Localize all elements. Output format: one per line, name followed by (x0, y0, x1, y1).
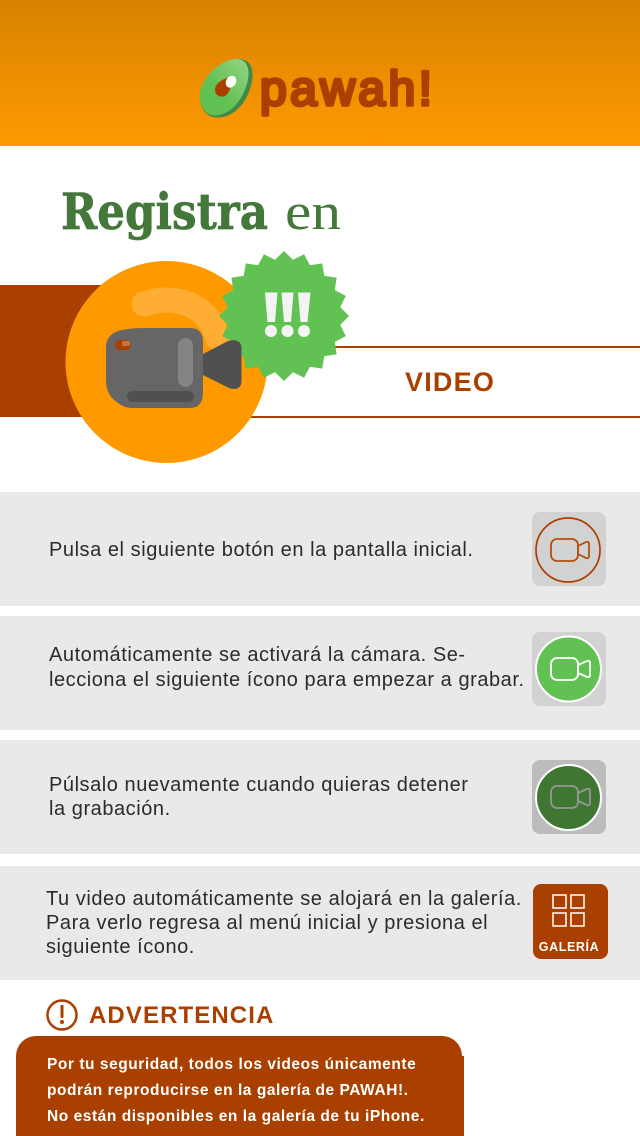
icon: gallery button: GALERÍA (539, 939, 599, 954)
title: Registra (61, 182, 268, 241)
step 4 text (46, 888, 522, 958)
icon: video camera (106, 328, 242, 408)
step 4 text: Tu video automáticamente se alojará en la galería. (46, 888, 522, 910)
logo: pawah! (260, 63, 432, 116)
warning text (47, 1056, 425, 1125)
brown side block (0, 285, 130, 417)
warning text: No están disponibles en la galería de tu iPhone. (47, 1108, 425, 1125)
icon: green record button (532, 632, 606, 706)
icon: gallery button (533, 884, 608, 959)
step 2 text: lecciona el siguiente ícono para empezar a grabar. (49, 669, 525, 691)
step 3 panel (0, 740, 640, 854)
step 1 text: Pulsa el siguiente botón en la pantalla inicial. (49, 539, 473, 561)
video ribbon lines (240, 346, 640, 418)
title: en (285, 184, 341, 241)
icon: warning (48, 1000, 76, 1030)
logo (200, 59, 432, 118)
step 1 panel (0, 492, 640, 606)
step 2 panel (0, 616, 640, 730)
icon: dark green stop button (532, 760, 606, 834)
icon: record button outline (532, 512, 606, 586)
header band (0, 0, 640, 146)
illustration: camera and badge (66, 251, 349, 463)
warning panel (16, 1036, 462, 1136)
warning panel tab (446, 1056, 464, 1136)
warning text: podrán reproducirse en la galería de PAWAH!. (47, 1082, 409, 1099)
step 3 text: la grabación. (49, 798, 171, 820)
step 2 text (49, 644, 525, 691)
heading: video: VIDEO (405, 367, 495, 397)
warning text: Por tu seguridad, todos los videos únicamente (47, 1056, 416, 1073)
step 4 text: Para verlo regresa al menú inicial y presiona el (46, 912, 488, 934)
step 3 text (49, 774, 468, 820)
step 4 text: siguiente ícono. (46, 936, 195, 958)
heading: advertencia: ADVERTENCIA (89, 1002, 274, 1029)
badge: starburst (219, 251, 349, 381)
signal arc (144, 300, 218, 338)
step 3 text: Púlsalo nuevamente cuando quieras detener (49, 774, 468, 796)
step 2 text: Automáticamente se activará la cámara. Se- (49, 644, 466, 666)
step 4 panel (0, 866, 640, 980)
orange circle (66, 261, 268, 463)
